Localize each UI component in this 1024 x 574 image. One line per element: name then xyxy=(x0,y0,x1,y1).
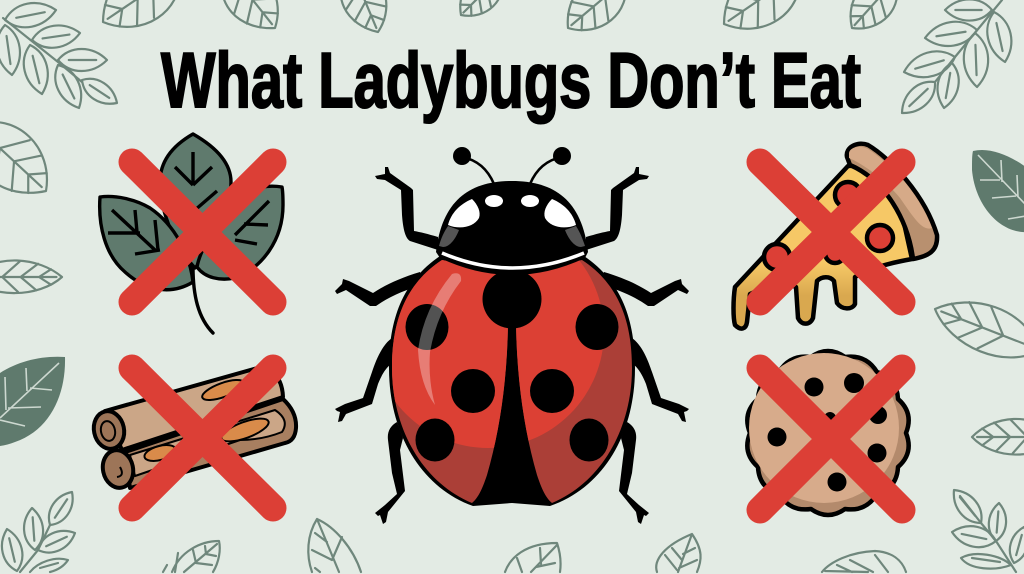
icon: leaves crossed out xyxy=(100,134,283,333)
red cross xyxy=(132,368,273,508)
icon: three green leaves xyxy=(100,134,283,333)
icon: cookie crossed out xyxy=(747,351,909,515)
spots xyxy=(406,270,618,462)
head xyxy=(436,181,588,275)
icon: dripping pizza slice xyxy=(734,144,937,329)
red cross xyxy=(132,162,273,302)
body shell xyxy=(388,256,635,506)
icon: logs crossed out xyxy=(90,367,296,508)
antennae xyxy=(453,147,571,184)
icon: pizza crossed out xyxy=(734,144,937,329)
red cross xyxy=(760,368,902,510)
icon: stacked wood logs xyxy=(90,367,296,491)
legs xyxy=(335,167,689,524)
red cross xyxy=(760,162,902,302)
shell highlight xyxy=(418,273,461,405)
icon: chocolate chip cookie xyxy=(747,351,909,515)
ladybug xyxy=(335,147,689,524)
